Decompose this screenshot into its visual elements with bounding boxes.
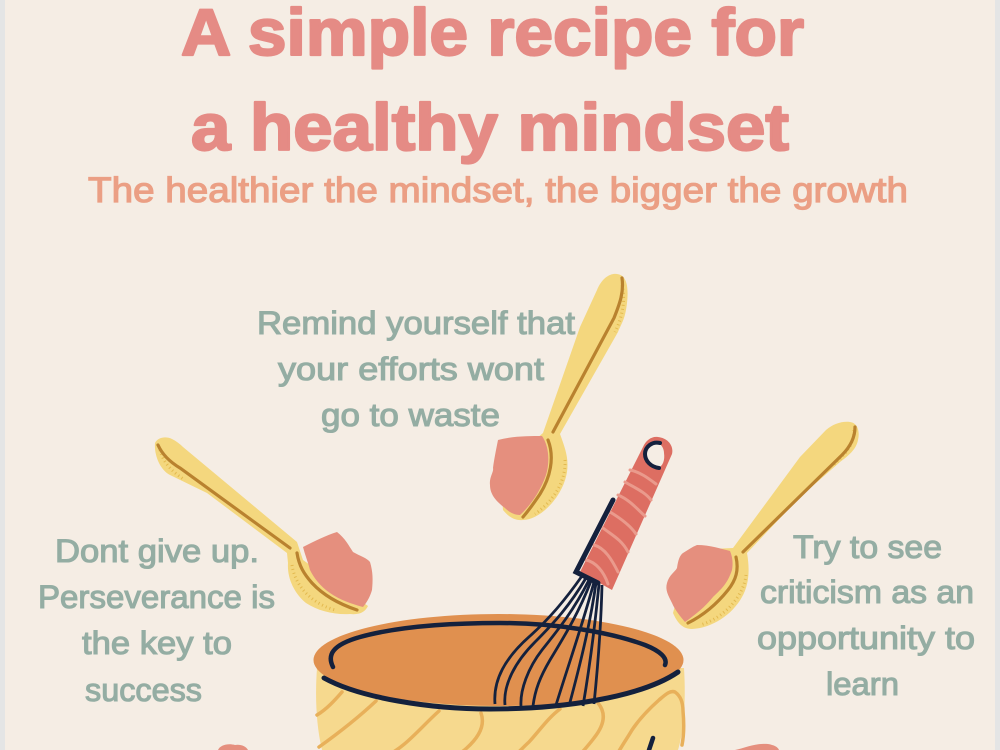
title xyxy=(181,0,804,164)
tip: criticism: learn xyxy=(826,666,899,702)
tip: perseverance: success xyxy=(85,672,202,708)
whisk wires xyxy=(495,576,602,706)
whisk xyxy=(495,437,672,706)
rim lines xyxy=(331,623,666,667)
tip: efforts xyxy=(257,305,575,433)
tip: criticism xyxy=(757,529,975,702)
handle navy edge xyxy=(576,500,613,583)
tip: perseverance: Dont give up. xyxy=(55,533,259,569)
bowl body xyxy=(316,668,685,750)
tip: perseverance xyxy=(38,533,275,708)
tip: efforts: your efforts wont xyxy=(278,351,544,387)
tip: perseverance: the key to xyxy=(82,625,232,661)
bowl wood grain xyxy=(317,692,684,750)
subtitle: The healthier the mindset, the bigger the growth xyxy=(88,171,908,210)
cropped spoon scoop: lower right xyxy=(735,744,779,750)
tip: perseverance: Perseverance is xyxy=(38,579,275,615)
tip: criticism: criticism as an xyxy=(760,574,974,610)
tip: criticism: opportunity to xyxy=(757,620,975,656)
tip: efforts: Remind yourself that xyxy=(257,305,575,341)
bowl rim xyxy=(314,614,684,706)
tip: efforts: go to waste xyxy=(321,397,500,433)
handle hole xyxy=(645,443,664,468)
small navy mark xyxy=(649,738,653,750)
spoon: top xyxy=(490,274,628,520)
spoon: right xyxy=(666,422,859,629)
handle stripes xyxy=(586,470,656,584)
mixing bowl xyxy=(314,614,685,750)
whisk handle xyxy=(580,437,672,590)
title: a healthy mindset xyxy=(191,90,789,164)
spoon: left xyxy=(155,437,373,614)
cropped spoon scoop: lower left xyxy=(218,744,248,750)
tip: criticism: Try to see xyxy=(793,529,942,565)
